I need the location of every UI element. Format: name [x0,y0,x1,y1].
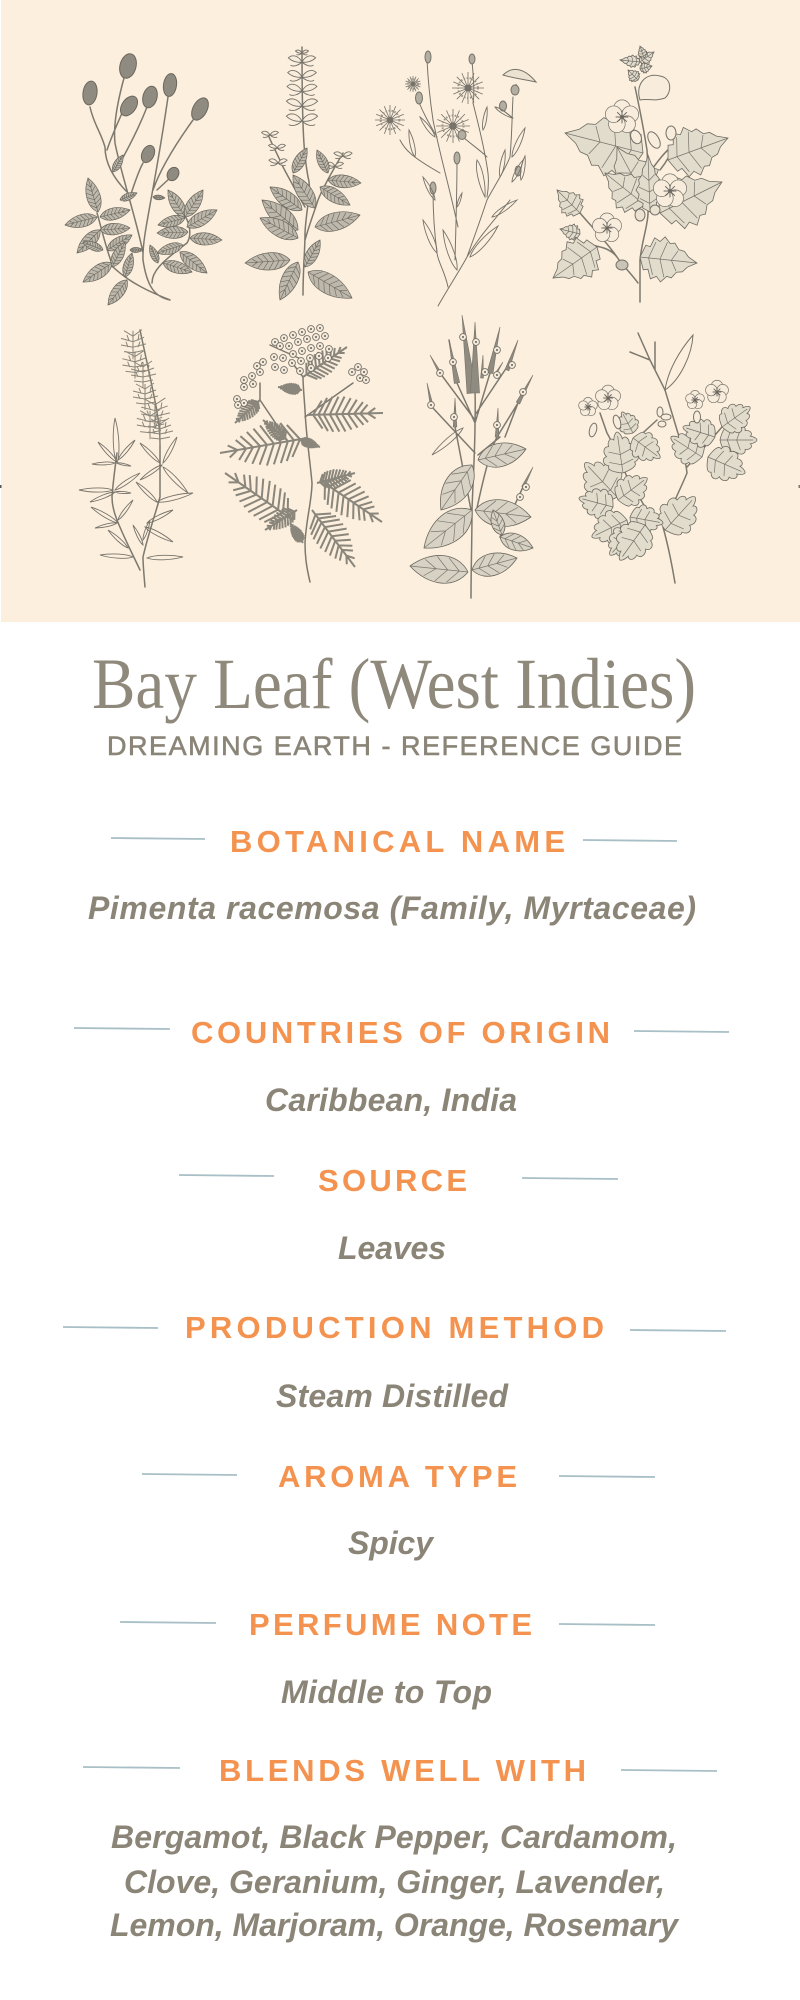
value: blends well with: Bergamot, Black Pepper, Cardamom, [111,1819,677,1855]
plant: vervain with spikes [409,314,536,598]
value: blends well with [110,1819,680,1943]
title: Bay Leaf (West Indies) [92,644,696,724]
section: source [179,1163,618,1266]
heading: botanical name: BOTANICAL NAME [230,824,565,859]
section: perfume note [120,1607,655,1710]
value: source: Leaves [338,1230,446,1266]
subtitle: DREAMING EARTH - REFERENCE GUIDE [107,731,682,761]
value: blends well with: Clove, Geranium, Ginger, Lavender, [124,1864,665,1900]
plant: thyme-like sprig [79,330,194,587]
plant: cornflower [375,51,536,306]
section: blends well with [83,1753,717,1943]
plant: sage spire [244,47,362,306]
heading: source: SOURCE [318,1163,467,1198]
value: aroma type: Spicy [348,1525,435,1561]
heading: production method: PRODUCTION METHOD [185,1310,604,1345]
section: aroma type [142,1459,655,1561]
section: countries of origin [74,1015,729,1118]
plant: mallow with leaves and flowers [541,44,737,302]
plant: celandine with lobed leaves [570,333,759,583]
value: countries of origin: Caribbean, India [265,1082,517,1118]
plant: tansy with fern leaves [214,325,392,582]
heading: aroma type: AROMA TYPE [278,1459,517,1494]
plant: burnet with oval heads [63,52,222,309]
value: production method: Steam Distilled [276,1378,509,1414]
heading: perfume note: PERFUME NOTE [249,1607,532,1642]
value: botanical name: Pimenta racemosa (Family, Myrtaceae) [88,890,696,926]
value: perfume note: Middle to Top [281,1674,492,1710]
section: botanical name [88,824,696,926]
heading: countries of origin: COUNTRIES OF ORIGIN [191,1015,610,1050]
section: production method [63,1310,726,1414]
heading: blends well with: BLENDS WELL WITH [219,1753,586,1788]
panel: botanical illustrations [0,0,800,622]
value: blends well with: Lemon, Marjoram, Orange, Rosemary [110,1907,680,1943]
